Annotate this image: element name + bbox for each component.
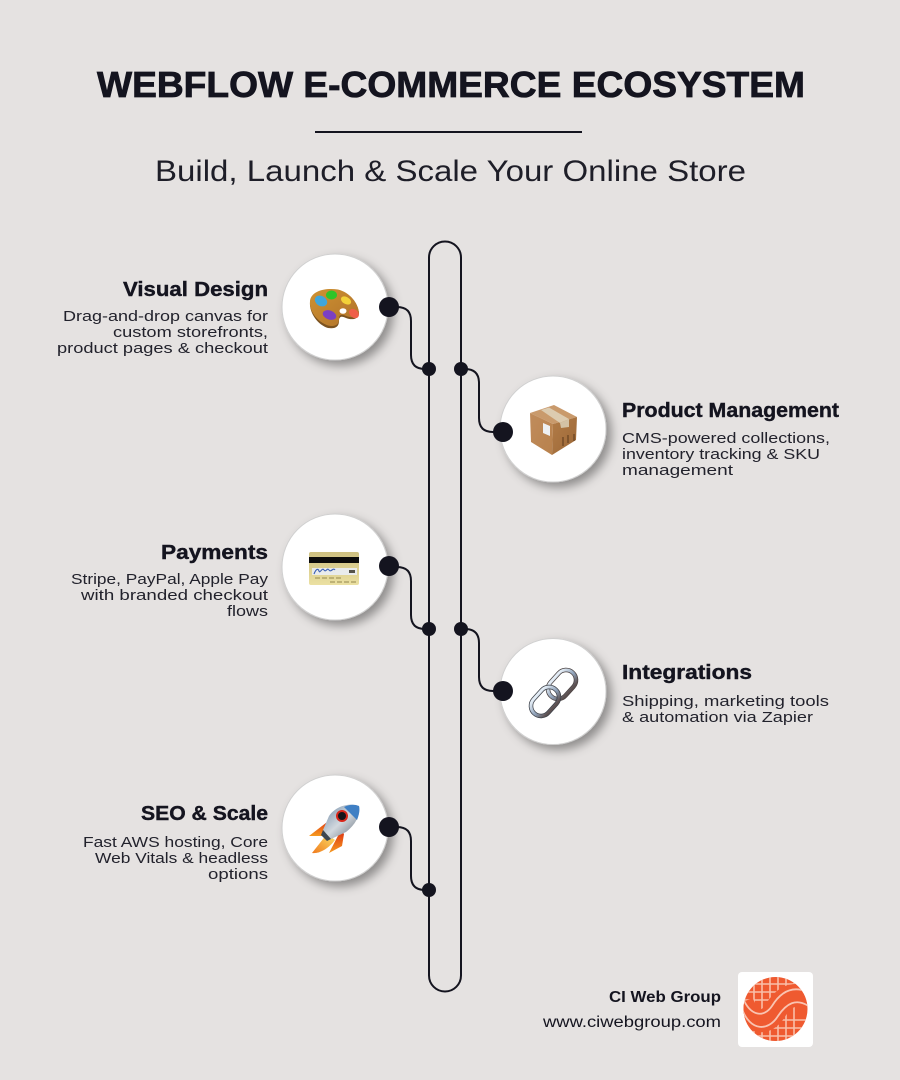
step: Product Management bbox=[454, 362, 839, 482]
step: SEO & Scale bbox=[83, 775, 436, 897]
heading: Visual Design: Visual Design bbox=[123, 279, 268, 301]
step: Visual Design bbox=[57, 254, 436, 376]
description: Payments: with branded checkout bbox=[80, 587, 269, 604]
description: Integrations bbox=[622, 693, 829, 726]
step: Integrations bbox=[454, 622, 829, 744]
connector: SEO & Scale bbox=[379, 817, 436, 897]
description: Payments: Stripe, PayPal, Apple Pay bbox=[71, 571, 269, 588]
icon circle: Product Management bbox=[500, 376, 606, 482]
infographic canvas bbox=[58, 71, 839, 1047]
description: Product Management: CMS-powered collections, bbox=[622, 430, 830, 447]
description: Payments bbox=[71, 571, 269, 620]
brand name: CI Web Group bbox=[609, 989, 721, 1006]
description: Product Management: inventory tracking & SKU bbox=[622, 446, 820, 463]
description: SEO & Scale: Fast AWS hosting, Core bbox=[83, 834, 268, 851]
icon circle: Payments bbox=[282, 514, 388, 620]
description: Integrations: & automation via Zapier bbox=[622, 709, 813, 726]
connector: Payments bbox=[379, 556, 436, 636]
heading: Payments: Payments bbox=[161, 542, 268, 564]
description: Integrations: Shipping, marketing tools bbox=[622, 693, 829, 710]
description: SEO & Scale: options bbox=[208, 866, 268, 883]
subtitle: Build, Launch & Scale Your Online Store bbox=[155, 155, 746, 188]
description: Visual Design bbox=[57, 308, 269, 357]
connector: Product Management bbox=[454, 362, 513, 442]
website: www.ciwebgroup.com bbox=[542, 1014, 721, 1031]
icon circle: Integrations bbox=[500, 638, 606, 744]
icon: paint palette bbox=[310, 289, 361, 328]
central timeline pill bbox=[429, 242, 461, 992]
heading: Integrations: Integrations bbox=[622, 662, 752, 684]
step: Payments bbox=[71, 514, 436, 636]
logo bbox=[738, 972, 813, 1047]
header bbox=[97, 64, 805, 188]
description: SEO & Scale: Web Vitals & headless bbox=[95, 850, 268, 867]
icon: chain links bbox=[527, 666, 580, 720]
description: Product Management bbox=[622, 430, 830, 479]
connector: Integrations bbox=[454, 622, 513, 701]
description: Payments: flows bbox=[227, 603, 268, 620]
heading: SEO & Scale: SEO & Scale bbox=[141, 803, 268, 825]
description: Visual Design: custom storefronts, bbox=[113, 324, 268, 341]
footer bbox=[542, 972, 813, 1047]
description: Product Management: management bbox=[622, 462, 734, 479]
icon: credit card bbox=[309, 552, 359, 585]
heading: Product Management: Product Management bbox=[622, 400, 839, 422]
connector: Visual Design bbox=[379, 297, 436, 376]
description: Visual Design: Drag-and-drop canvas for bbox=[63, 308, 268, 325]
icon circle: Visual Design bbox=[282, 254, 388, 360]
title: WEBFLOW E-COMMERCE ECOSYSTEM bbox=[97, 64, 805, 105]
description: Visual Design: product pages & checkout bbox=[57, 340, 269, 357]
icon circle: SEO & Scale bbox=[282, 775, 388, 881]
icon: rocket bbox=[309, 805, 359, 853]
description: SEO & Scale bbox=[83, 834, 268, 883]
icon: cardboard box bbox=[530, 405, 577, 455]
